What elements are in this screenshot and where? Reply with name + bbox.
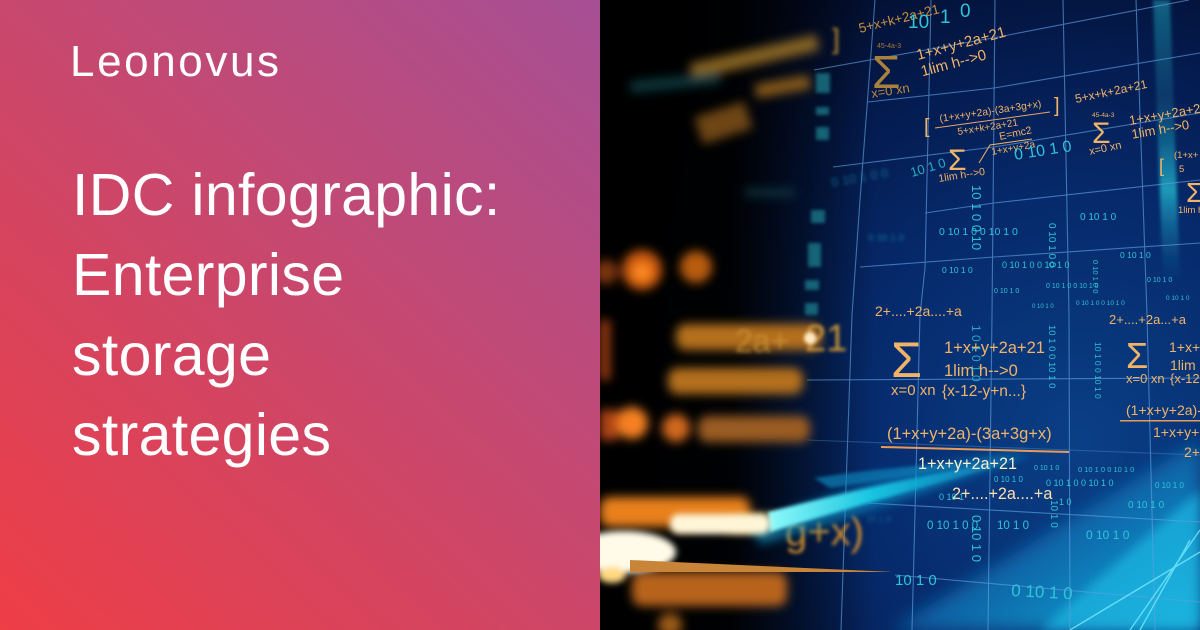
sharp cyan binary digits: 1 0 1 0 1 0 [969,325,983,382]
sharp orange formulas: 5+x+k+2a+21 [957,117,1019,138]
sharp cyan binary digits: 0 10 1 0 [1013,138,1073,164]
sharp cyan binary digits: 10 1 0 [895,572,937,589]
summation signs: Σ [1092,117,1111,150]
sharp orange formulas: x=0 xn [870,80,911,101]
sharp cyan binary digits: 1 0 [1059,497,1072,507]
sharp orange formulas: [ [1159,156,1164,176]
sharp cyan binary digits: 0 10 1 0 [1155,481,1184,490]
sharp orange formulas: 1lim h-->0 [944,362,1018,380]
sharp cyan binary digits: 10 1 0 [1048,500,1059,528]
sharp orange formulas: 1+x+y+2a+21 [944,339,1045,357]
sharp orange formulas: [ [924,116,930,138]
summation signs: Σ [872,46,900,98]
summation signs: Σ [948,144,967,177]
sharp cyan binary digits: 0 10 1 0 [1080,212,1117,223]
sharp orange formulas: 1+x+y+2a [991,139,1036,158]
sharp orange formulas: x=0 xn [1088,139,1123,158]
blurred big formula fragments [735,318,864,554]
sharp orange formulas: {x-12-y+n...} [942,383,1026,400]
sharp orange formulas: x=0 xn [891,382,936,399]
sharp cyan binary digits: 0 10 1 0 0 10 1 0 [939,226,1018,238]
sharp cyan binary digits: 10 1 0 [997,520,1029,532]
sharp cyan binary digits: 0 10 1 0 [1011,581,1073,603]
sharp cyan binary digits: 0 10 1 0 [1034,465,1059,472]
sharp orange formulas: 5 [1179,164,1184,175]
sharp cyan binary digits: 0 10 1 0 [1128,500,1165,511]
sharp cyan binary digits: 10 1 0 [908,155,947,180]
sharp orange formulas: 1+x+ [1169,339,1200,355]
sharp orange formulas: 1lim h-->0 [919,46,988,80]
panel: gradient title panel [0,0,600,630]
cyan light streaks [750,452,1032,545]
sharp cyan binary digits [830,1,1190,603]
cyan corner beams [1070,530,1200,630]
vertical digits: 10 1 0 0 10 [969,185,984,250]
title [72,162,501,468]
white light flare [572,514,770,583]
sharp orange formulas: 1+x+y+ [1153,424,1199,440]
sharp cyan binary digits: 0 10 1 0 0 10 1 0 [1046,478,1114,488]
sharp cyan binary digits: 0 10 1 0 [868,233,905,244]
sharp orange formulas: (1+x+y+2a)- [1126,402,1200,418]
sharp orange formulas: 45-4a-3 [1092,112,1115,119]
title: strategies [72,402,331,468]
sharp cyan binary digits: 0 10 1 0 0 10 1 0 [1078,465,1134,474]
summation signs [872,46,1200,388]
sharp cyan binary digits: 0 10 1 0 0 10 1 0 [1076,300,1125,307]
sharp cyan binary digits: 0 10 1 0 0 [1046,223,1057,268]
photo background [600,0,1200,630]
summation signs: Σ [1126,335,1148,376]
sharp cyan binary digits: 0 [960,1,971,22]
title: storage [72,322,271,388]
vertical teal light bar [1153,0,1180,280]
sharp cyan binary digits: 10 1 0 [866,514,891,524]
sharp cyan binary digits: 0 10 1 0 0 [830,165,889,190]
grid lines [807,0,1200,630]
sharp cyan binary digits: 10 1 0 0 10 1 0 [1046,325,1057,388]
sharp orange formulas: ] [1054,95,1060,117]
sharp orange formulas: (1+x+y+2a)-(3a+3g+x) [939,99,1042,125]
sharp orange formulas: 1lim h-->0 [1130,117,1190,142]
sharp orange formulas: (1+x+ [1174,150,1199,161]
sharp orange formulas: 5+x+k+2a+21 [857,1,941,36]
panel: photo of glowing formulas on a blue grid [600,0,1200,630]
title: IDC infographic: [72,162,501,228]
title: Enterprise [72,242,344,308]
sharp cyan binary digits: 0 10 1 0 [1166,295,1190,302]
sharp cyan binary digits: 0 10 1 0 [1086,528,1130,542]
sharp cyan binary digits: 0 10 1 0 0 10 1 0 [1002,260,1070,270]
summation signs: Σ [891,332,922,388]
sharp orange formulas: 45-4a-3 [877,43,901,50]
orange bokeh lights [594,250,821,630]
sharp orange formulas: 1+x+y+2a+21 [915,24,1008,64]
sharp cyan binary digits: 10 1 0 0 10 1 0 [1093,342,1103,399]
sharp cyan binary digits: 10 [908,12,929,33]
sharp orange formulas: 1+x+y+2a+21 [918,455,1017,473]
sharp orange formulas: 2+....+2a....+a [875,303,962,319]
sharp orange formulas: 2+ [1184,444,1200,460]
sharp cyan binary digits: 0 10 1 0 0 10 1 0 [1046,283,1099,290]
sharp orange formulas: {x-12 [1170,371,1200,386]
sharp orange formulas: 2+....+2a...+a [1109,312,1187,327]
orange beam [630,560,893,572]
sharp cyan binary digits: 0 10 1 0 [1147,277,1172,284]
sharp orange formulas: 1lim h-->0 [938,166,986,185]
sharp cyan binary digits: 0 10 1 0 [994,288,1019,295]
sharp cyan binary digits: 0 10 1 0 [1032,304,1054,310]
sharp orange formulas: x=0 xn [1126,371,1165,386]
sharp cyan binary digits: 1 [940,7,951,28]
blurred orange formula text, top left [630,35,820,197]
sharp cyan binary digits: 0 10 1 [939,492,964,502]
sharp cyan binary digits: 0 10 1 0 [1120,250,1151,260]
sharp cyan binary digits: 0 10 1 0 [969,515,984,562]
logo: Leonovus wordmark: Leonovus [70,37,282,86]
sharp cyan binary digits: 0 10 1 0 [994,475,1023,484]
sharp orange formulas: E=mc2 [998,124,1033,143]
sharp cyan binary digits: 0 10 1 0 0 [1091,260,1100,293]
blurred big formula fragments: 21 [805,318,847,360]
sharp orange formulas: (1+x+y+2a)-(3a+3g+x) [887,425,1052,443]
sharp cyan binary digits: 0 10 1 0 0 [927,520,978,532]
blurred teal digit column [805,73,830,315]
sharp orange formulas: 2+....+2a....+a [952,485,1052,503]
sharp orange formulas: 5+x+k+2a+21 [1074,77,1149,106]
sharp orange formulas [857,1,1200,503]
blurred big formula fragments: g+x) [785,510,864,554]
sharp cyan binary digits: 0 10 1 0 [942,265,973,275]
panel: photo of glowing formulas on a blue grid: ] [832,23,840,54]
blurred big formula fragments: 2a+ [735,323,789,359]
